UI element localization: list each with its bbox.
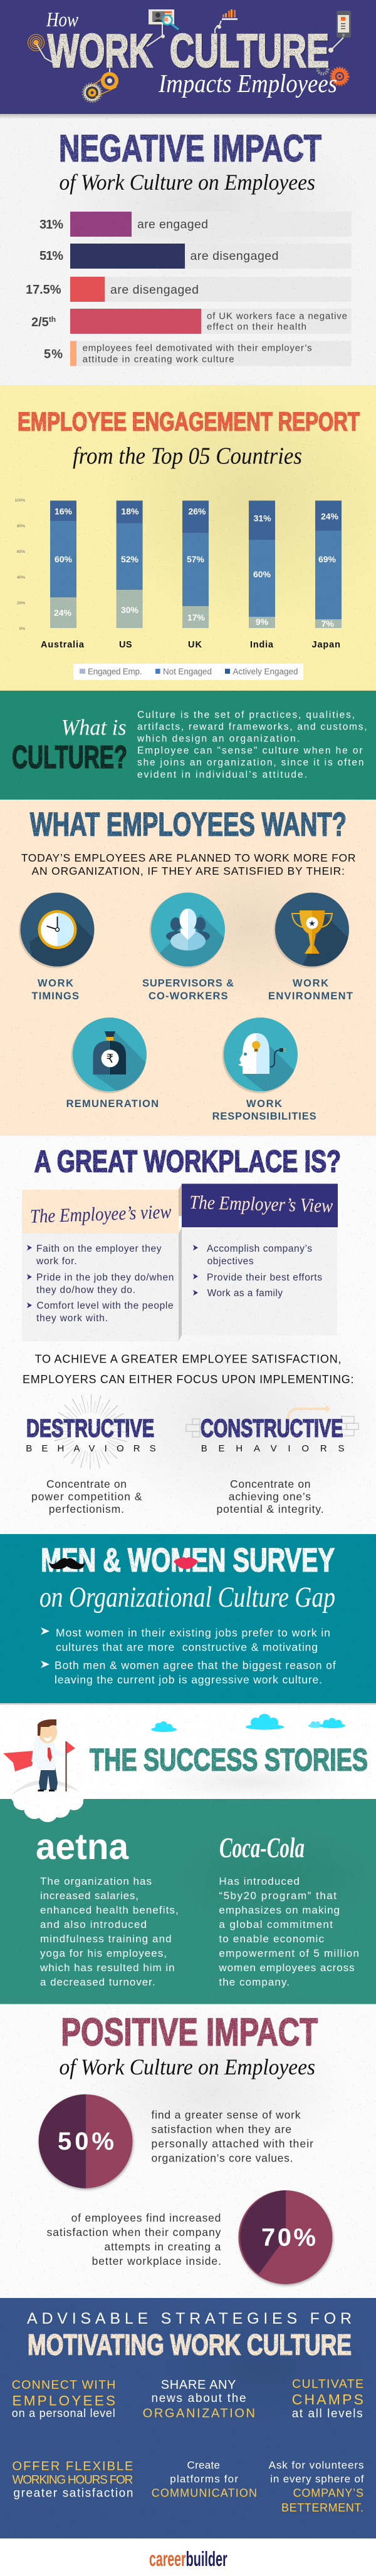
employee view list: Faith on the employer they — [36, 1244, 162, 1254]
country labels: India — [250, 640, 274, 650]
chart legend: Not Engaged — [163, 667, 212, 676]
chart legend — [73, 664, 303, 680]
bar: 5% demotivated: employees feel demotivated with their employer’s — [83, 343, 312, 353]
employer view list: objectives — [207, 1256, 254, 1267]
bar: Australia: 24% — [54, 607, 72, 617]
bar: US: 52% — [121, 554, 139, 564]
strategy: ask for volunteers — [269, 2459, 364, 2514]
bar: 17.5% disengaged: are disengaged — [110, 283, 199, 297]
y axis labels: 0% — [19, 627, 25, 631]
y axis labels: 100% — [14, 498, 25, 503]
heading: the employer's view: The Employer’s View — [189, 1191, 333, 1217]
icon: moustache — [49, 1558, 85, 1569]
bar: Australia — [50, 501, 76, 628]
intro text: TODAY’S EMPLOYEES ARE PLANNED TO WORK MORE FOR — [21, 852, 355, 864]
heading: culture?: CULTURE? — [12, 739, 127, 775]
employee view list: they do/how they do. — [36, 1285, 135, 1296]
logo: Coca-Cola: Coca-Cola — [219, 1832, 305, 1863]
block: constructive behaviors — [186, 1405, 358, 1515]
text: 50% finding: find a greater sense of work — [152, 2109, 301, 2121]
text: Coca-Cola story: to enable economic — [219, 1933, 325, 1945]
panel: the employer's view — [182, 1183, 338, 1336]
text: 50% finding: organization’s core values. — [152, 2151, 293, 2164]
bar: India: 9% — [256, 617, 269, 627]
intro text — [21, 852, 355, 877]
text: Coca-Cola story: emphasizes on making — [219, 1904, 340, 1916]
strategy: share news: SHARE ANY — [161, 2378, 236, 2392]
bar: 2/5th UK workers: of UK workers face a negative — [207, 311, 347, 322]
icon: trophy — [273, 893, 349, 968]
label: work timings: WORK — [38, 978, 73, 989]
text: Coca-Cola story: Has introduced — [219, 1875, 300, 1887]
y axis labels: 80% — [17, 524, 25, 528]
employee view list — [27, 1244, 174, 1324]
label: work environment: WORK — [293, 978, 328, 989]
pie chart: 70%: 70% — [261, 2224, 316, 2252]
block: constructive behaviors: achieving one’s — [229, 1490, 311, 1503]
text: Coca-Cola story: women employees across — [218, 1962, 355, 1974]
block: constructive behaviors: potential & integrity. — [217, 1503, 324, 1515]
text: Coca-Cola story: “5by20 program” that — [219, 1890, 337, 1902]
strategy: flexible hours — [13, 2460, 133, 2500]
label: supervisors and co-workers: CO-WORKERS — [149, 991, 228, 1002]
survey findings: Most women in their existing jobs prefer to work in — [56, 1627, 330, 1639]
bar: UK: 57% — [187, 554, 205, 564]
label: work responsibilities — [212, 1098, 316, 1122]
block: destructive behaviors: perfectionism. — [49, 1503, 124, 1515]
text: aetna story: The organization has — [40, 1875, 152, 1887]
icon: smartphone — [337, 11, 351, 38]
culture definition text — [137, 710, 367, 780]
panel: the employee's view — [22, 1184, 182, 1341]
country labels: Japan — [312, 640, 340, 650]
panel: what employees want — [0, 800, 376, 1136]
icon: pulley gears — [83, 72, 118, 101]
culture definition text: artifacts, reward frameworks, and customs, — [137, 721, 367, 733]
employee view list: work for. — [36, 1256, 76, 1267]
bar: UK: 26% — [188, 506, 206, 516]
strategy: cultivate champs: CULTIVATE — [292, 2378, 363, 2391]
icon: radar target — [28, 34, 44, 51]
strategy: cultivate champs — [292, 2378, 363, 2421]
employee view list: Pride in the job they do/when — [36, 1272, 174, 1283]
stacked bar chart — [14, 498, 342, 680]
strategy: cultivate champs: at all levels — [292, 2408, 363, 2421]
y axis labels — [14, 498, 25, 631]
text: 50% finding — [152, 2109, 313, 2164]
text: 50% finding: satisfaction when they are — [152, 2123, 291, 2135]
employer view list: Accomplish company’s — [207, 1244, 312, 1254]
strategy: connect with employees: CONNECT WITH — [12, 2378, 115, 2392]
employer view list — [193, 1244, 322, 1299]
panel: men and women survey — [0, 1534, 376, 1707]
culture definition text: she joins an organization, since it is often — [137, 758, 363, 768]
label: supervisors and co-workers — [142, 978, 234, 1002]
header word: How: How — [46, 9, 78, 31]
illustration: superhero manager on cloud — [3, 1719, 85, 1822]
panel: header banner — [0, 0, 376, 114]
pie chart: 50% — [39, 2094, 133, 2188]
panel: great workplace — [0, 1136, 376, 1534]
bar: 2/5th UK workers: th — [49, 315, 56, 324]
block: destructive behaviors: DESTRUCTIVE — [26, 1415, 154, 1443]
strategy: ask for volunteers: BETTERMENT. — [281, 2501, 363, 2514]
survey findings: leaving the current job is aggressive work culture. — [55, 1673, 322, 1686]
text: Coca-Cola story: empowerment of 5 million — [219, 1947, 359, 1959]
icon: profile card and magnifier — [149, 9, 179, 29]
bar: 17.5% disengaged — [26, 277, 352, 302]
country labels: UK — [188, 640, 202, 650]
connector lines — [36, 21, 343, 78]
block: constructive behaviors: Concentrate on — [230, 1478, 311, 1490]
country labels — [41, 640, 340, 650]
logo: aetna: aetna — [36, 1826, 129, 1867]
strategy: connect with employees: EMPLOYEES — [13, 2393, 115, 2408]
bar: 51% disengaged — [39, 244, 352, 269]
block: destructive behaviors: Concentrate on — [46, 1478, 127, 1490]
label: remuneration: REMUNERATION — [66, 1098, 159, 1110]
strategy: communication platforms: COMMUNICATION — [152, 2487, 257, 2500]
text: 50% finding: personally attached with their — [152, 2138, 313, 2150]
bar: Japan — [315, 501, 342, 629]
text: Coca-Cola story: the company. — [219, 1976, 290, 1988]
icon: clock — [19, 893, 94, 968]
icon: money bag — [71, 1018, 152, 1094]
subheading: from the Top 05 Countries — [73, 443, 302, 470]
text: 70% finding: satisfaction when their company — [47, 2226, 221, 2239]
strategy: communication platforms: Create — [187, 2459, 220, 2471]
strategy: flexible hours: WORKING HOURS FOR — [13, 2474, 133, 2487]
text: aetna story: a decreased turnover. — [40, 1976, 155, 1988]
bar: India: 31% — [254, 513, 271, 523]
survey findings: Both men & women agree that the biggest reason of — [55, 1659, 336, 1672]
bar: 17.5% disengaged: 17.5% — [26, 283, 61, 297]
bar: Australia: 60% — [55, 554, 73, 564]
intro text: AN ORGANIZATION, IF THEY ARE SATISFIED BY THEIR: — [31, 865, 345, 877]
block: constructive behaviors: BEHAVIORS — [201, 1443, 345, 1454]
heading: the employee's view: The Employee’s view — [29, 1200, 172, 1227]
employer view list: Provide their best efforts — [207, 1272, 322, 1283]
bar: India — [249, 501, 275, 628]
text: Coca-Cola story: a global commitment — [219, 1919, 333, 1930]
label: work responsibilities: RESPONSIBILITIES — [212, 1111, 316, 1122]
strategy: cultivate champs: CHAMPS — [292, 2391, 363, 2408]
bar: US — [117, 501, 143, 628]
icon: clouds — [151, 1714, 345, 1732]
strategy: communication platforms: platforms for — [170, 2473, 238, 2485]
strategy: ask for volunteers: COMPANY’S — [293, 2487, 363, 2500]
country labels: US — [119, 640, 132, 650]
y axis labels: 60% — [17, 550, 25, 554]
label: work environment — [268, 978, 353, 1002]
bar: Australia: 16% — [55, 506, 73, 516]
label: supervisors and co-workers: SUPERVISORS & — [142, 978, 234, 989]
bar: Japan: 24% — [321, 511, 339, 521]
strategy: share news: ORGANIZATION — [143, 2407, 255, 2421]
panel: what is culture — [0, 691, 376, 800]
text: aetna story: yoga for his employees, — [40, 1947, 167, 1959]
text: to achieve greater satisfaction — [23, 1352, 353, 1386]
bar: US: 18% — [121, 506, 139, 516]
bar: 31% engaged — [39, 212, 352, 237]
subheading: of Work Culture on Employees — [59, 2054, 315, 2079]
text: 70% finding: of employees find increased — [71, 2212, 221, 2224]
block: destructive behaviors — [26, 1404, 156, 1515]
icon: trophy: ★ — [308, 919, 316, 928]
panel: success stories company details — [0, 1799, 376, 2004]
text: 70% finding: attempts in creating a — [104, 2240, 221, 2253]
label: work timings — [31, 978, 79, 1002]
text: aetna story: increased salaries, — [40, 1890, 138, 1902]
bar: 5% demotivated: attitude in creating work culture — [83, 354, 234, 364]
header title: Work Culture: WORK — [48, 24, 153, 77]
panel: employee engagement report — [0, 376, 376, 691]
panel: negative impact — [0, 114, 376, 385]
employee view list: they work with. — [36, 1313, 108, 1324]
text: to achieve greater satisfaction: TO ACHIEVE A GREATER EMPLOYEE SATISFACTION, — [35, 1352, 341, 1365]
survey findings: cultures that are more constructive & motivating — [56, 1641, 318, 1653]
chart legend: Actively Engaged — [233, 667, 298, 676]
strategy: share news — [143, 2378, 255, 2421]
employer view list: Work as a family — [207, 1288, 283, 1299]
icon: lips — [174, 1557, 198, 1569]
block: destructive behaviors: power competition & — [31, 1490, 142, 1503]
bar: India: 60% — [253, 569, 271, 579]
text: aetna story — [39, 1875, 179, 1988]
bar: US: 30% — [121, 605, 139, 615]
header subtitle: Impacts Employees: Impacts Employees — [158, 69, 337, 98]
icon: money bag: ₹ — [107, 1053, 114, 1066]
bar: 5% demotivated — [44, 341, 352, 366]
country labels: Australia — [41, 640, 85, 650]
text: aetna story: enhanced health benefits, — [40, 1904, 179, 1916]
culture definition text: Culture is the set of practices, qualities, — [137, 710, 355, 720]
bar: 31% engaged: 31% — [39, 218, 63, 232]
bar: 51% disengaged: are disengaged — [191, 249, 278, 263]
text: aetna story: and also introduced — [40, 1919, 147, 1930]
y axis labels: 20% — [17, 601, 25, 605]
strategy: share news: news about the — [152, 2392, 246, 2405]
logo: careerbuilder: career — [149, 2547, 186, 2570]
strategy: communication platforms — [152, 2459, 257, 2500]
strategy: connect with employees — [12, 2378, 115, 2419]
bar: 31% engaged: are engaged — [137, 218, 208, 232]
text: aetna story: which has resulted him in — [39, 1962, 175, 1974]
culture definition text: which design an organization. — [137, 734, 300, 744]
panel: positive impact — [0, 2004, 376, 2298]
bar: Japan: 7% — [321, 619, 334, 629]
logo: careerbuilder: builder — [186, 2547, 227, 2570]
bar: UK: 17% — [187, 612, 206, 622]
pie chart: 50%: 50% — [58, 2128, 114, 2155]
culture definition text: evident in individual’s attitude. — [137, 770, 307, 780]
strategy: flexible hours: OFFER FLEXIBLE — [13, 2460, 133, 2473]
bar: 51% disengaged: 51% — [39, 249, 63, 263]
block: destructive behaviors: BEHAVIORS — [26, 1443, 156, 1454]
bar: 2/5th UK workers: 2/5 — [31, 316, 49, 329]
bar: 5% demotivated: 5% — [44, 348, 63, 361]
culture definition text: Employee can "sense" culture when he or — [137, 745, 363, 756]
text: 70% finding: better workplace inside. — [92, 2255, 221, 2267]
bar: 2/5th UK workers — [31, 309, 352, 334]
label: work responsibilities: WORK — [246, 1098, 282, 1110]
icon: supervisors — [149, 893, 225, 968]
bar: UK — [182, 501, 209, 628]
text: 70% finding — [47, 2212, 221, 2267]
subheading: of Work Culture on Employees — [59, 170, 315, 195]
pie chart: 70% — [238, 2190, 332, 2284]
text: Coca-Cola story — [218, 1875, 359, 1988]
strategy: ask for volunteers: Ask for volunteers — [269, 2459, 363, 2471]
icon: orange gear — [318, 64, 348, 85]
header title: Work Culture — [48, 24, 329, 77]
chart legend: Engaged Emp. — [88, 667, 142, 676]
icon: bar chart on bracket — [222, 9, 238, 20]
label: work timings: TIMINGS — [31, 991, 79, 1002]
bar: Japan: 69% — [318, 554, 337, 564]
survey findings — [41, 1627, 336, 1686]
strategy: flexible hours: greater satisfaction — [13, 2487, 133, 2500]
text: aetna story: mindfulness training and — [40, 1933, 172, 1945]
heading: what is: What is — [61, 715, 127, 740]
panel: success stories header — [0, 1705, 376, 1822]
heading: advisable strategies for: ADVISABLE STRATEGIES FOR — [27, 2310, 352, 2327]
text: to achieve greater satisfaction: EMPLOYERS CAN EITHER FOCUS UPON IMPLEMENTING: — [23, 1373, 353, 1386]
icon: head with bulb — [222, 1018, 301, 1096]
strategy: ask for volunteers: in every sphere of — [270, 2473, 364, 2485]
strategy: connect with employees: on a personal level — [12, 2407, 115, 2419]
label: work environment: ENVIRONMENT — [268, 991, 353, 1002]
panel: advisable strategies — [0, 2298, 376, 2538]
bar: 2/5th UK workers: effect on their health — [207, 322, 306, 332]
y axis labels: 40% — [17, 575, 25, 580]
employee view list: Comfort level with the people — [36, 1301, 174, 1311]
